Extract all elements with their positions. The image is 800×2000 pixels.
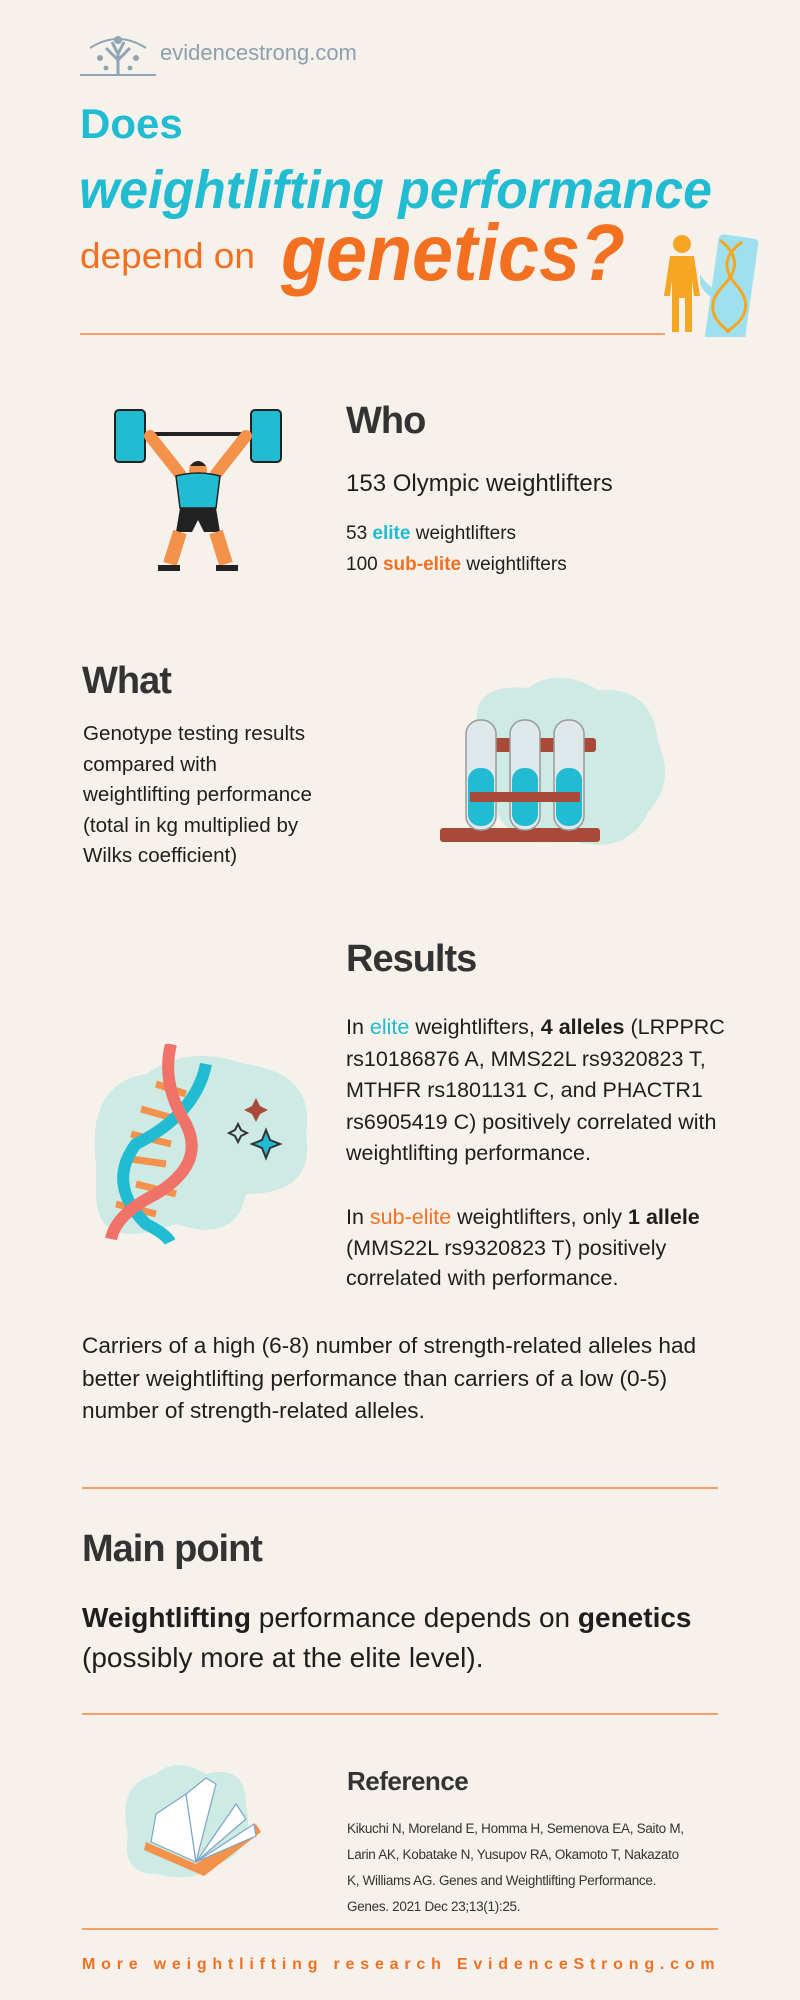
text: citation: Kikuchi N, Moreland E, Homma H, Semenova EA, Saito M,	[347, 1821, 684, 1836]
text: method: (total in kg multiplied by	[83, 814, 298, 836]
title: weightlifting performance	[79, 160, 712, 220]
logo	[80, 36, 357, 76]
text: groups	[346, 523, 567, 575]
heading: who: Who	[346, 400, 425, 442]
title: genetics?	[280, 208, 625, 297]
text: citation: Genes. 2021 Dec 23;13(1):25.	[347, 1899, 520, 1914]
panel: what	[82, 660, 312, 867]
text: sub-elite results: In sub-elite weightlifters, only 1 allele	[346, 1205, 700, 1229]
icon: dna	[94, 1044, 308, 1245]
title	[79, 100, 712, 297]
panel: results	[346, 938, 725, 1290]
text: elite results: MTHFR rs1801131 C, and PHACTR1	[346, 1078, 703, 1102]
title: Does	[80, 100, 183, 147]
text: elite results: weightlifting performance.	[346, 1141, 591, 1165]
panel: reference	[347, 1766, 684, 1914]
heading: main point: Main point	[82, 1528, 262, 1570]
panel: main point	[82, 1528, 692, 1673]
icon: test tubes	[440, 678, 665, 845]
icon: person with DNA	[664, 234, 758, 337]
text: sub-elite results: (MMS22L rs9320823 T) positively	[346, 1236, 666, 1260]
text: method: Genotype testing results	[83, 722, 305, 745]
text: method: compared with	[83, 752, 217, 776]
text: elite results: rs10186876 A, MMS22L rs9320823 T,	[346, 1046, 706, 1070]
text: carriers	[82, 1333, 696, 1423]
text: citation	[347, 1821, 684, 1914]
text: groups: 53 elite weightlifters	[346, 523, 516, 544]
icon: weightlifter	[114, 409, 282, 571]
text: citation: Larin AK, Kobatake N, Yusupov RA, Okamoto T, Nakazato	[347, 1847, 679, 1862]
text: carriers: better weightlifting performance than carriers of a low (0-5)	[82, 1366, 667, 1390]
heading: what: What	[82, 660, 171, 702]
title: depend on	[80, 235, 255, 276]
text: conclusion: (possibly more at the elite level).	[82, 1642, 484, 1673]
heading: results: Results	[346, 938, 476, 980]
footer: More weightlifting research EvidenceStrong.com	[82, 1956, 720, 1973]
logo: evidencestrong.com	[160, 40, 357, 65]
text: groups: 100 sub-elite weightlifters	[346, 554, 567, 575]
text: sub-elite results: correlated with performance.	[346, 1266, 618, 1290]
text: elite results	[346, 1015, 725, 1165]
text: conclusion: Weightlifting performance depends on genetics	[82, 1602, 692, 1633]
text: conclusion	[82, 1602, 692, 1673]
text: participants: 153 Olympic weightlifters	[346, 470, 613, 497]
text: method	[83, 722, 312, 867]
icon: book	[125, 1765, 261, 1878]
text: sub-elite results	[346, 1205, 700, 1290]
text: carriers: Carriers of a high (6-8) number of strength-related alleles had	[82, 1333, 696, 1358]
text: method: weightlifting performance	[83, 783, 312, 806]
text: method: Wilks coefficient)	[83, 844, 237, 867]
panel: who	[346, 400, 613, 575]
text: carriers: number of strength-related alleles.	[82, 1398, 425, 1423]
text: elite results: In elite weightlifters, 4 alleles (LRPPRC	[346, 1015, 725, 1039]
text: citation: K, Williams AG. Genes and Weightlifting Performance.	[347, 1873, 656, 1888]
heading: reference: Reference	[347, 1766, 468, 1796]
text: elite results: rs6905419 C) positively correlated with	[346, 1110, 716, 1134]
